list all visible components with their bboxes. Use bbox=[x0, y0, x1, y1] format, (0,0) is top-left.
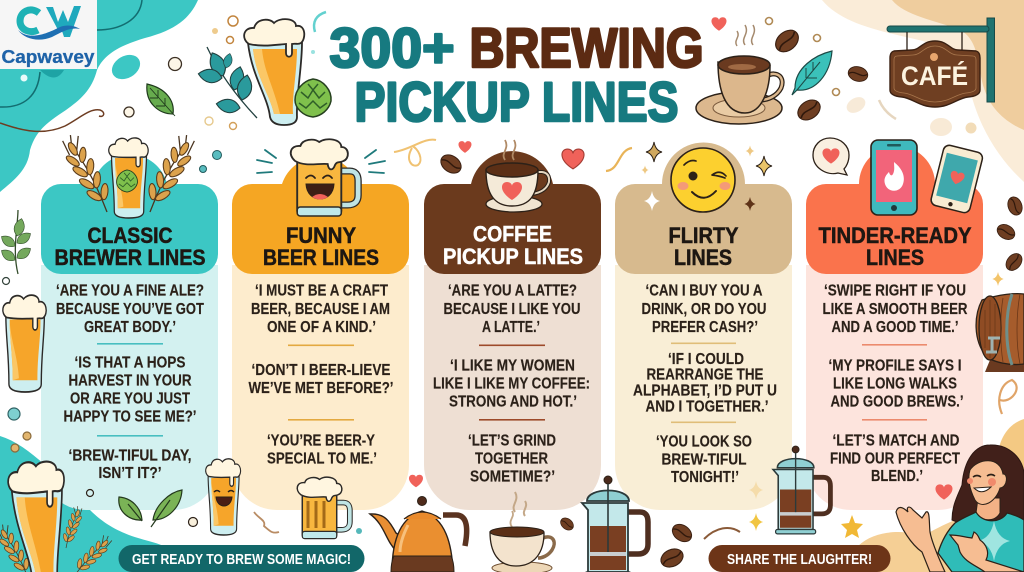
heading: classic brewer lines bbox=[54, 223, 206, 270]
pointing arm bbox=[950, 532, 1024, 572]
background blob: beige top right bbox=[822, 0, 1024, 182]
heading: funny beer lines: BEER LINES bbox=[263, 245, 379, 270]
heading: tinder-ready lines bbox=[818, 223, 972, 270]
text: flirty lines: ‘CAN I BUY YOU A bbox=[646, 282, 762, 300]
text: classic lines bbox=[56, 282, 204, 482]
text: funny lines: ‘DON’T I BEER-LIEVE bbox=[252, 362, 390, 379]
raised hand bbox=[896, 507, 945, 572]
text: tinder-ready lines: ‘MY PROFILE SAYS I bbox=[828, 358, 962, 374]
panel: classic brewer lines bbox=[41, 130, 218, 510]
text: flirty lines bbox=[633, 282, 777, 486]
panel header: coffee bbox=[424, 151, 601, 274]
text: funny lines: SPECIAL TO ME.’ bbox=[267, 450, 377, 468]
text: tinder-ready lines: AND A GOOD TIME.’ bbox=[832, 319, 958, 336]
title: PICKUP LINES: PICKUP LINES bbox=[354, 70, 678, 133]
text: classic lines: ‘BREW-TIFUL DAY, bbox=[68, 448, 192, 464]
text: flirty lines: ALPHABET, I’D PUT U bbox=[633, 382, 777, 400]
text: flirty lines: BREW-TIFUL bbox=[662, 452, 746, 468]
facial features bbox=[967, 474, 996, 492]
text: coffee lines: LIKE I LIKE MY COFFEE: bbox=[433, 376, 590, 392]
heading: funny beer lines: FUNNY bbox=[286, 223, 356, 248]
shirt bbox=[938, 512, 1024, 572]
heading: flirty lines: LINES bbox=[674, 245, 732, 270]
icon: phones and speech bubble bbox=[813, 138, 984, 215]
heading: coffee pickup lines: PICKUP LINES bbox=[443, 244, 583, 269]
text: tinder-ready lines: BLEND.’ bbox=[871, 468, 923, 485]
icon: bottom beans and sparkles bbox=[558, 481, 863, 570]
text: coffee lines: BECAUSE I LIKE YOU bbox=[444, 301, 580, 318]
icon: bottom left wheat bbox=[0, 506, 114, 572]
text: classic lines: ‘IS THAT A HOPS bbox=[74, 354, 186, 372]
icon: left bubbles bbox=[8, 408, 31, 452]
shirt sparkle bbox=[978, 521, 1010, 561]
icon: left beer glass bbox=[3, 295, 46, 392]
text: flirty lines: ‘YOU LOOK SO bbox=[656, 434, 752, 450]
decorative small icons upper left bbox=[0, 58, 221, 284]
text: funny lines: ‘YOU’RE BEER-Y bbox=[267, 432, 376, 450]
icon: coffee cup with heart bbox=[486, 140, 549, 212]
icon: bottom centre coffee cup bbox=[490, 492, 554, 572]
face bbox=[969, 461, 1006, 504]
icon: wheat and hop beer glass bbox=[61, 130, 196, 218]
text: coffee lines: A LATTE.’ bbox=[482, 319, 540, 336]
background blob: teal top left bbox=[0, 0, 198, 192]
icon: kettle bbox=[370, 475, 467, 572]
icon: small beer mug bbox=[254, 477, 362, 539]
text: flirty lines: REARRANGE THE bbox=[646, 366, 764, 384]
text: flirty lines: DRINK, OR DO YOU bbox=[642, 301, 766, 318]
text: tinder-ready lines bbox=[822, 282, 968, 485]
icon: laughing beer mug bbox=[257, 139, 385, 216]
text: classic lines: HARVEST IN YOUR bbox=[68, 372, 192, 390]
text: flirty lines: ‘IF I COULD bbox=[668, 351, 744, 368]
icon: cafe hanging sign bbox=[887, 18, 994, 107]
heading: tinder-ready lines: LINES bbox=[866, 245, 924, 270]
banner: share the laughter bbox=[708, 545, 891, 572]
text: funny lines bbox=[248, 282, 394, 468]
sign text: CAFÉ bbox=[901, 60, 968, 91]
heading: classic brewer lines: BREWER LINES bbox=[54, 245, 206, 270]
text: coffee lines: ‘LET’S GRIND bbox=[468, 432, 556, 450]
text: classic lines: GREAT BODY.’ bbox=[84, 319, 176, 336]
hair bbox=[952, 445, 1024, 535]
banner text: SHARE THE LAUGHTER! bbox=[727, 552, 872, 568]
icon: wooden barrel bbox=[976, 294, 1024, 372]
panel: coffee pickup lines bbox=[424, 140, 601, 510]
illustration: woman pointing bbox=[896, 445, 1024, 572]
heading: coffee pickup lines: COFFEE bbox=[473, 222, 552, 246]
banner text: GET READY TO BREW SOME MAGIC! bbox=[132, 552, 351, 568]
heart bbox=[935, 484, 953, 500]
panel header: tinder-ready bbox=[806, 146, 983, 274]
neck bbox=[976, 498, 1000, 520]
icon: sparkles and hearts between panels bbox=[394, 140, 772, 177]
heading: classic brewer lines: CLASSIC bbox=[88, 223, 173, 248]
background blob: tan bottom right bbox=[840, 419, 1024, 572]
panel: funny beer lines bbox=[232, 139, 409, 510]
panel: tinder-ready lines bbox=[806, 138, 984, 510]
icon: hop leaves under classic panel bbox=[86, 490, 198, 527]
icon: coffee cup and saucer top right bbox=[696, 25, 782, 124]
text: tinder-ready lines: LIKE LONG WALKS bbox=[833, 376, 957, 392]
panel: flirty lines bbox=[615, 142, 792, 510]
heading: flirty lines: FLIRTY bbox=[668, 223, 739, 248]
icon: large french press bbox=[582, 476, 648, 572]
text: classic lines: ISN’T IT?’ bbox=[98, 465, 162, 482]
text: classic lines: OR ARE YOU JUST bbox=[70, 390, 190, 408]
text: coffee lines: SOMETIME?’ bbox=[470, 468, 555, 486]
icon: bottom left large beer bbox=[8, 462, 64, 572]
main title bbox=[330, 16, 704, 133]
text: funny lines: WE’VE MET BEFORE?’ bbox=[248, 380, 394, 397]
text: classic lines: HAPPY TO SEE ME?’ bbox=[64, 408, 196, 426]
text: funny lines: ‘I MUST BE A CRAFT bbox=[255, 282, 388, 300]
heading: coffee pickup lines bbox=[443, 222, 583, 269]
text: tinder-ready lines: LIKE A SMOOTH BEER bbox=[822, 301, 968, 318]
panel header: flirty bbox=[615, 142, 792, 274]
logo bbox=[0, 0, 97, 69]
icon: winking emoji bbox=[644, 148, 756, 212]
text: coffee lines: TOGETHER bbox=[475, 450, 548, 468]
text: coffee lines bbox=[433, 282, 590, 486]
text: funny lines: ONE OF A KIND.’ bbox=[267, 319, 376, 336]
text: tinder-ready lines: AND GOOD BREWS.’ bbox=[830, 394, 964, 410]
text: flirty lines: PREFER CASH?’ bbox=[652, 319, 758, 336]
panel header: classic bbox=[41, 155, 218, 274]
text: classic lines: BECAUSE YOU’VE GOT bbox=[56, 301, 204, 318]
banner: get ready to brew bbox=[118, 545, 364, 572]
icon: small french press bbox=[773, 446, 830, 534]
text: coffee lines: ‘ARE YOU A LATTE? bbox=[448, 282, 577, 300]
text: tinder-ready lines: ‘SWIPE RIGHT IF YOU bbox=[824, 282, 966, 300]
heading: tinder-ready lines: TINDER-READY bbox=[818, 223, 972, 248]
text: coffee lines: STRONG AND HOT.’ bbox=[449, 394, 577, 410]
title: 300+: 300+ bbox=[330, 16, 454, 79]
logo wordmark: Capwavey bbox=[2, 47, 95, 67]
background blob: teal bottom left bbox=[0, 436, 168, 572]
heading: funny beer lines bbox=[263, 223, 379, 270]
icon: small smiling beer bbox=[206, 459, 241, 535]
text: tinder-ready lines: FIND OUR PERFECT bbox=[830, 450, 960, 468]
icon: right side beans bbox=[992, 195, 1024, 414]
text: coffee lines: ‘I LIKE MY WOMEN bbox=[450, 358, 575, 374]
text: funny lines: BEER, BECAUSE I AM bbox=[251, 301, 390, 318]
heading: flirty lines bbox=[668, 223, 739, 270]
title: BREWING: BREWING bbox=[470, 16, 704, 79]
panel header: funny bbox=[232, 156, 409, 274]
text: classic lines: ‘ARE YOU A FINE ALE? bbox=[56, 282, 204, 300]
text: flirty lines: TONIGHT!’ bbox=[671, 469, 739, 486]
text: tinder-ready lines: ‘LET’S MATCH AND bbox=[832, 432, 960, 450]
icon: title beer, leaves and hop bbox=[197, 12, 331, 130]
icon: top right beans, heart and leaf bbox=[711, 17, 869, 124]
text: flirty lines: AND I TOGETHER.’ bbox=[646, 398, 768, 416]
